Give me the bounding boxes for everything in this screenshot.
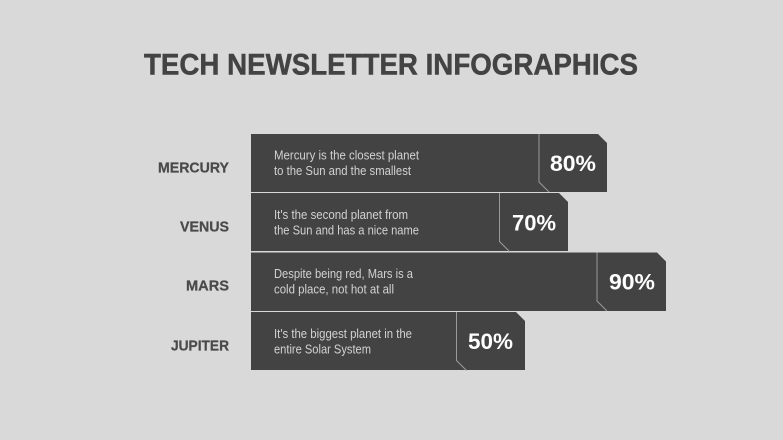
bar: Jupiter xyxy=(251,312,525,370)
description line 2: Mars: cold place, not hot at all xyxy=(274,282,394,296)
divider: Mercury xyxy=(539,134,549,192)
label: Mars: MARS xyxy=(186,278,229,294)
value: 80%: 80% xyxy=(550,151,596,176)
label: Jupiter: JUPITER xyxy=(171,338,229,354)
row: Jupiter xyxy=(171,312,525,370)
value: 50%: 50% xyxy=(468,329,513,354)
title: TECH NEWSLETTER INFOGRAPHICS xyxy=(144,48,638,82)
description: Jupiter: It's the biggest planet in the xyxy=(274,327,412,341)
bar: Mercury xyxy=(251,134,607,192)
label: Venus: VENUS xyxy=(180,218,229,236)
bar: Mars xyxy=(251,252,666,311)
row: Venus xyxy=(180,193,568,252)
label: Mercury: MERCURY xyxy=(158,160,229,176)
description line 2: Jupiter: entire Solar System xyxy=(274,342,371,356)
value: 90%: 90% xyxy=(609,270,655,294)
bar: Venus xyxy=(251,193,568,251)
description: Venus: It's the second planet from xyxy=(274,208,408,222)
row: Mars xyxy=(186,252,666,311)
description line 2: Venus: the Sun and has a nice name xyxy=(274,224,419,238)
value: 70%: 70% xyxy=(512,210,556,236)
row: Mercury xyxy=(158,134,607,192)
description line 2: Mercury: to the Sun and the smallest xyxy=(274,164,411,178)
description: Mercury: Mercury is the closest planet xyxy=(274,148,419,162)
divider: Jupiter xyxy=(456,312,466,370)
description: Mars: Despite being red, Mars is a xyxy=(274,267,413,281)
divider: Mars xyxy=(597,252,607,311)
divider: Venus xyxy=(500,193,510,252)
